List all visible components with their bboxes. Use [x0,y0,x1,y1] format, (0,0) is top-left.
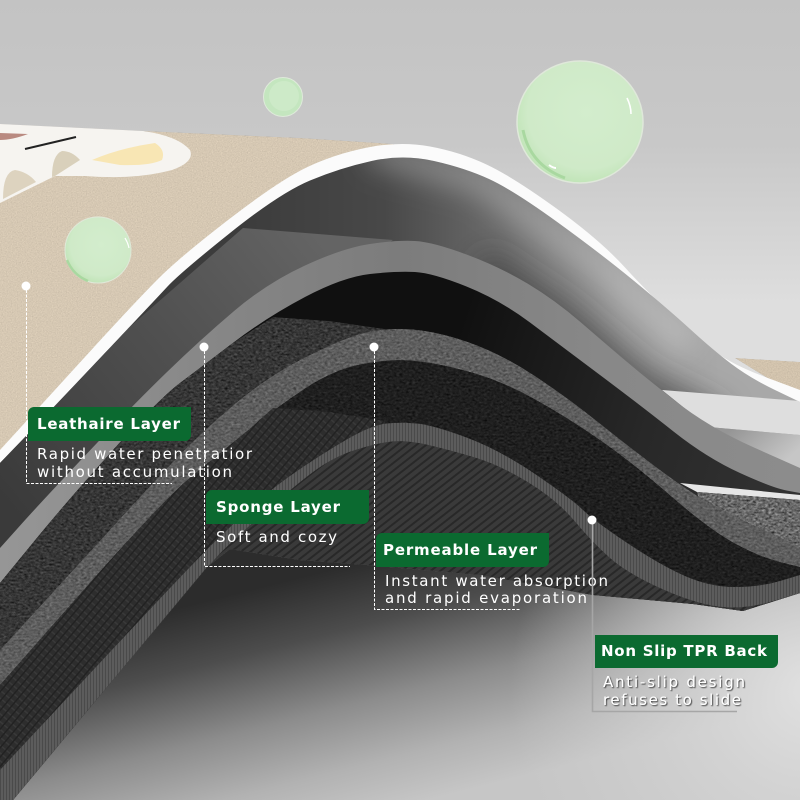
callout: Leathaire Layer [22,282,253,484]
description: Anti-slip design [603,673,745,691]
leader line [588,516,737,712]
heading: Permeable Layer [383,541,538,559]
description: Rapid water penetratior [37,445,253,463]
permeable layer edge band [0,329,800,684]
black cavity under sponge layer [0,272,800,800]
description: Instant water absorption [385,572,608,590]
heading: Leathaire Layer [37,415,181,433]
description: and rapid evaporation [385,589,587,607]
printed cat pattern [0,124,191,203]
dark underside of permeable layer [0,360,800,800]
white top edge [0,144,800,680]
heading badge [595,635,778,668]
heading badge [206,490,369,524]
description: without accumulation [37,463,232,481]
bubble: on mat surface [65,217,131,283]
leader line [200,342,350,566]
base layer edge band [0,423,800,800]
description: Soft and cozy [216,528,337,546]
callout: Non Slip TPR Back [588,516,778,712]
non slip back hatched surface [0,441,800,800]
panel: underside of top layer [0,158,800,548]
bubble: large top right [517,61,643,183]
heading badge [376,533,549,567]
description [603,673,745,709]
leader line [22,282,172,484]
callout: Permeable Layer [370,342,608,610]
heading badge [28,407,191,441]
callout: Sponge Layer [200,342,369,566]
leader line [370,342,520,610]
permeable layer textured surface [0,317,385,650]
panel: tan leathaire top surface [0,124,394,450]
description [37,445,253,481]
heading: Sponge Layer [216,498,341,516]
description [385,572,608,607]
description: refuses to slide [603,691,741,709]
sponge layer edge band [0,240,800,583]
bubble: small top [264,78,302,116]
heading: Non Slip TPR Back [601,642,768,660]
panel: tan right end [736,358,800,390]
permeable surface at right [697,492,800,552]
white stripe at right [680,483,800,500]
diamond knit surface of base layer [0,408,385,800]
